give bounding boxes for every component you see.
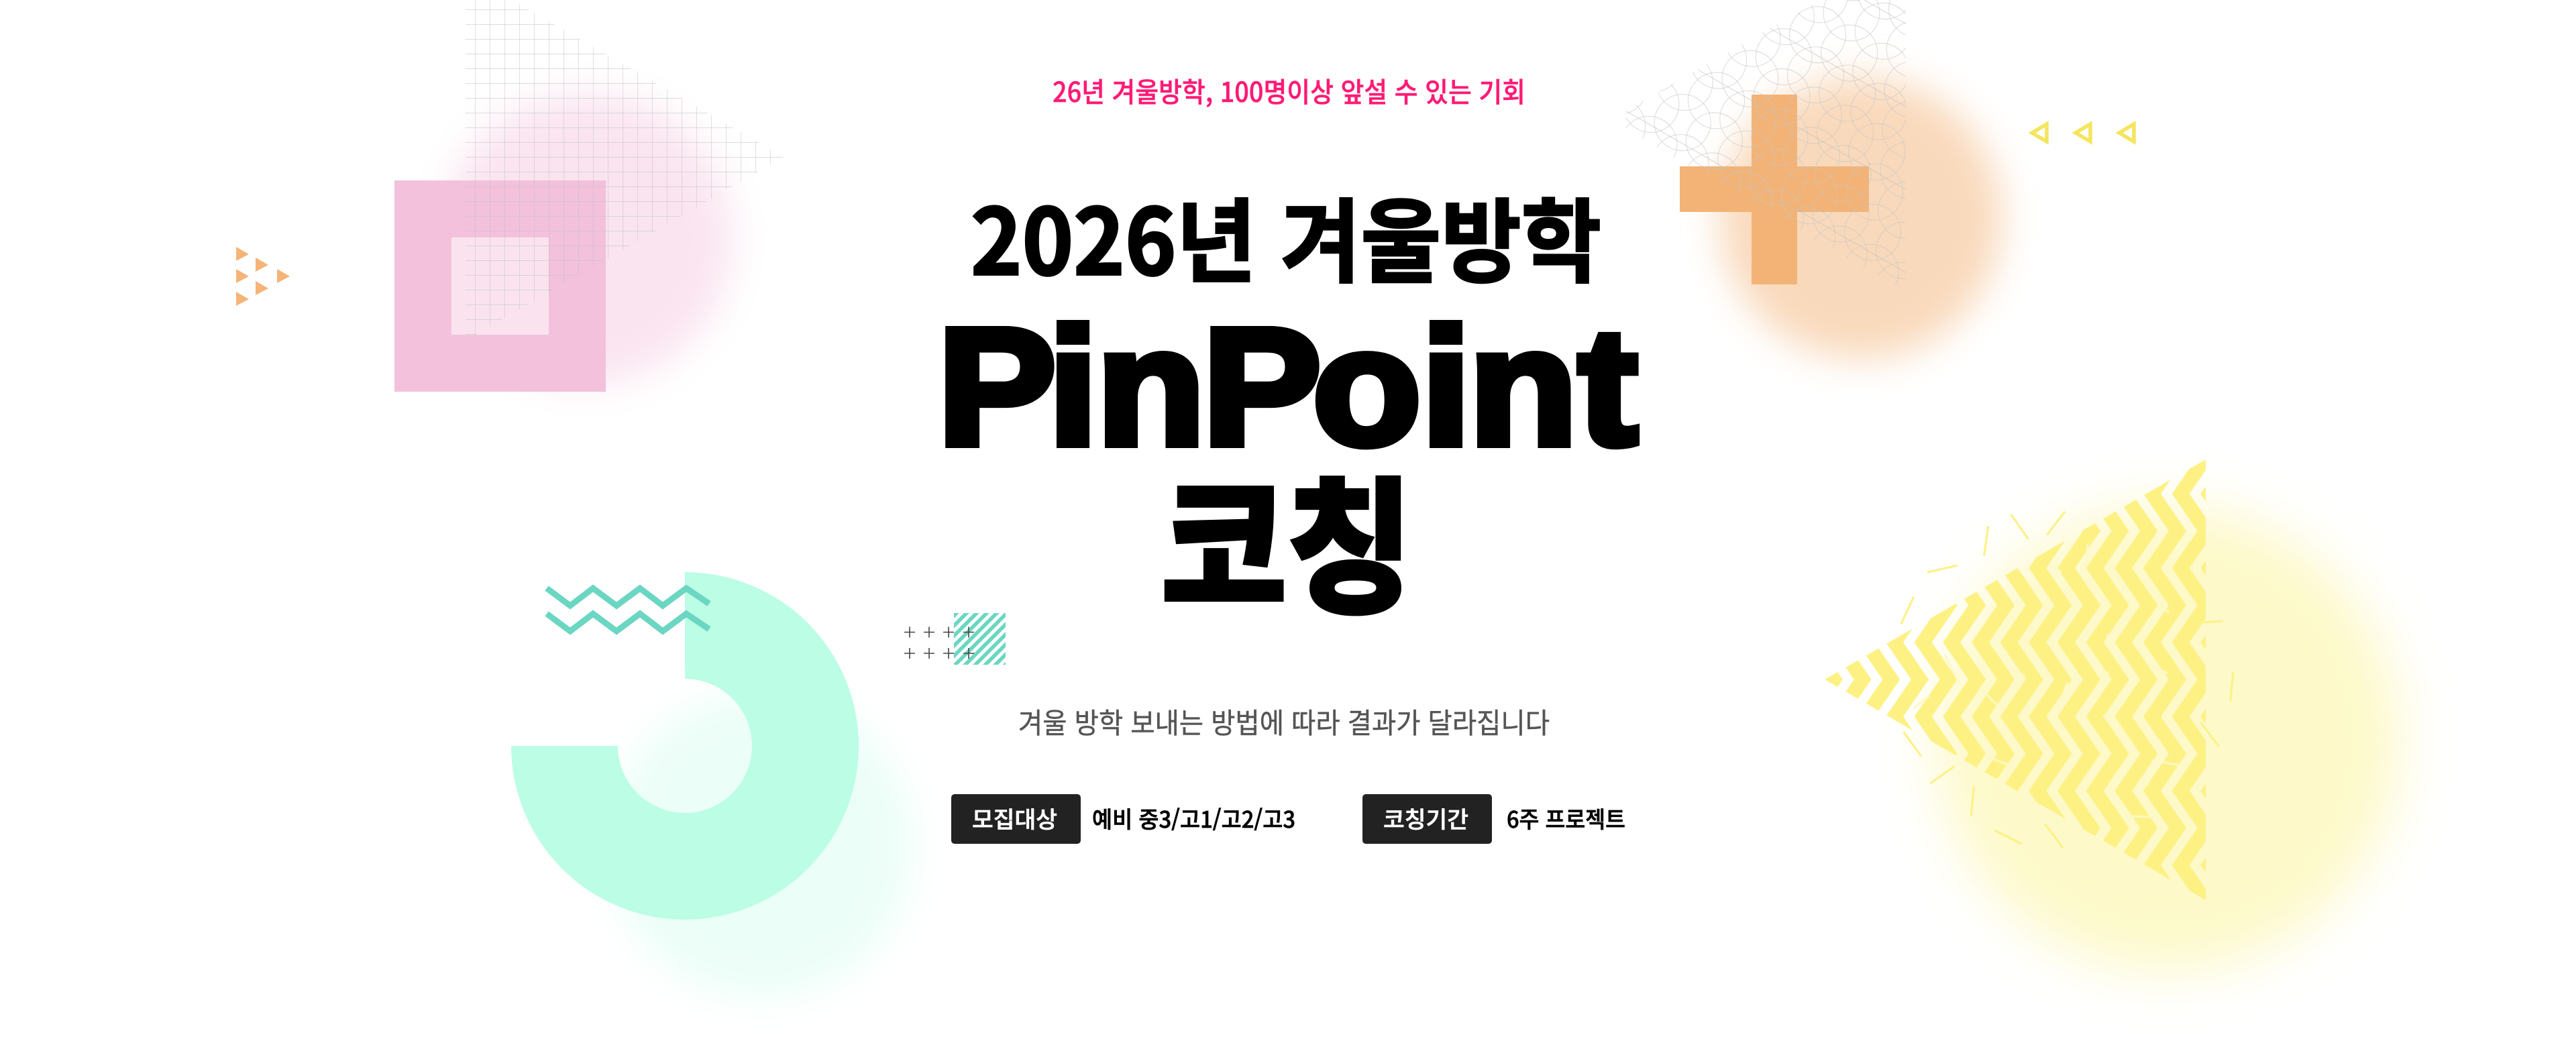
- small plus marks: [904, 626, 974, 659]
- heading: 2026년 겨울방학: 2026년 겨울방학: [971, 169, 1601, 302]
- info: recruitment target: 예비 중3/고1/고2/고3: [1092, 802, 1295, 834]
- web arc triangle pattern: [1626, 0, 1906, 292]
- icon: yellow outlined triangles: [2032, 124, 2134, 142]
- info: coaching period: 코칭기간: [1383, 802, 1468, 834]
- info: coaching period: [1362, 794, 1625, 844]
- icon: orange triangle cluster: [236, 247, 290, 306]
- pink blurred circle: [442, 94, 732, 384]
- orange plus shape: [1680, 95, 1869, 284]
- orange blurred circle: [1720, 77, 2002, 359]
- info: recruitment target: 모집대상: [972, 802, 1057, 834]
- yellow scattered dashes: [1901, 512, 2233, 848]
- subtitle: 겨울 방학 보내는 방법에 따라 결과가 달라집니다: [1018, 701, 1550, 742]
- heading: 코칭: 코칭: [1161, 431, 1413, 643]
- tagline: 26년 겨울방학, 100명이상 앞설 수 있는 기회: [1053, 70, 1525, 110]
- mint blurred circle: [610, 694, 913, 997]
- hatched teal square: [954, 613, 1006, 665]
- info: coaching period: 6주 프로젝트: [1507, 802, 1625, 834]
- yellow chevron triangle: [1825, 459, 2206, 900]
- mint three-quarter ring: [511, 572, 859, 920]
- pink square frame: [394, 180, 606, 392]
- teal zigzag lines: [547, 588, 709, 631]
- heading: PinPoint: PinPoint: [938, 294, 1638, 480]
- grid triangle pattern: [466, 0, 784, 341]
- info: recruitment target: [951, 794, 1295, 844]
- yellow blurred circle: [1937, 508, 2400, 971]
